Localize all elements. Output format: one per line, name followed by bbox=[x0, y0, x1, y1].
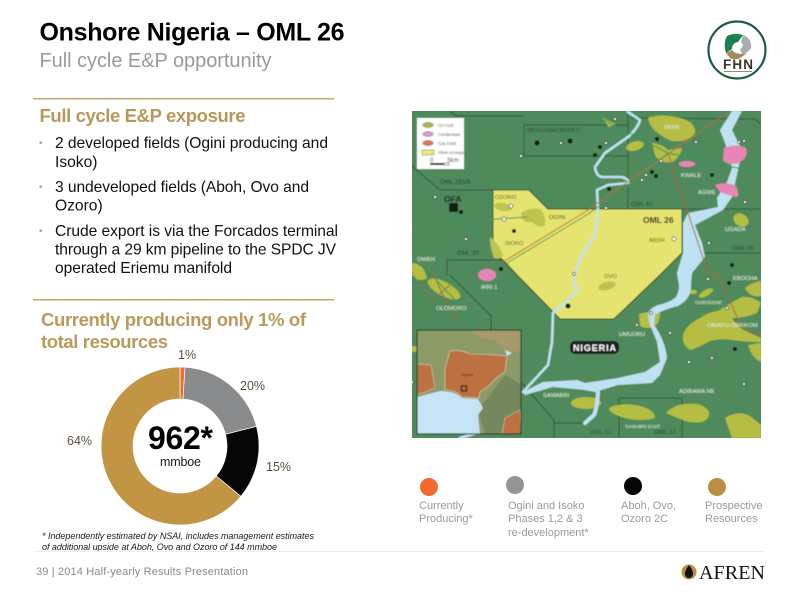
licence boundaries bbox=[412, 111, 761, 438]
heading: currently producing bbox=[41, 309, 307, 352]
legend: categories bbox=[419, 476, 762, 539]
inset map: Nigeria bbox=[461, 373, 474, 377]
map labels: OFA bbox=[444, 194, 461, 204]
map: OML 26: SAMABRI EAST bbox=[625, 424, 661, 430]
legend item: currently producing: Currently bbox=[419, 500, 464, 512]
bullet list: • bbox=[39, 226, 43, 237]
legend item: prospective resources: Resources bbox=[705, 513, 758, 525]
legend item: Aboh, Ovo, Ozoro 2C bbox=[621, 477, 676, 525]
legend box: Gas Field bbox=[438, 141, 457, 146]
map: OML 26: KWALE bbox=[681, 173, 701, 179]
legend box bbox=[417, 118, 465, 169]
map: OML 26: SAMABRI bbox=[543, 393, 569, 399]
bullet list bbox=[39, 135, 338, 277]
NIGERIA label bbox=[570, 341, 619, 354]
donut centre value: 962* bbox=[148, 420, 214, 456]
OFA block bbox=[449, 203, 458, 212]
NIGERIA label: NIGERIA bbox=[573, 343, 616, 353]
footer text: 39 | 2014 Half-yearly Results Presentation bbox=[36, 566, 248, 578]
inset: sea bbox=[417, 391, 483, 434]
donut centre unit: mmboe bbox=[160, 455, 201, 469]
map labels: OBODUGWA/OBODETI bbox=[526, 128, 580, 134]
oil well dots bbox=[459, 137, 737, 351]
map labels: OVO bbox=[604, 274, 617, 280]
oil fields bbox=[410, 116, 761, 438]
panel: full cycle exposure bbox=[33, 98, 338, 300]
map: OML 26: UMUORU bbox=[619, 332, 645, 338]
donut chart bbox=[67, 348, 291, 525]
map labels: ABOH bbox=[649, 238, 665, 244]
legend item: prospective resources bbox=[705, 478, 762, 525]
legend box: Oil Field bbox=[438, 123, 454, 128]
map: OML 26: UGADA bbox=[725, 227, 746, 233]
map labels: OML 26 bbox=[643, 215, 674, 225]
pink condensate fields bbox=[478, 146, 747, 281]
bullet list: 3 undeveloped fields (Aboh, Ovo and bbox=[55, 179, 309, 196]
legend item: prospective resources: Prospective bbox=[705, 500, 762, 512]
bullet list: operated Eriemu manifold bbox=[55, 260, 232, 277]
pipelines bbox=[412, 112, 761, 335]
map labels: OGINI bbox=[549, 215, 566, 221]
map labels: OML 27 bbox=[654, 429, 676, 436]
map labels: OML 60 bbox=[631, 201, 653, 208]
bullet list: • bbox=[39, 182, 43, 193]
legend item: Ogini and Isoko: Phases 1,2 & 3 bbox=[508, 513, 583, 525]
inset: Congo bbox=[502, 410, 521, 434]
bullet list: through a 29 km pipeline to the SPDC JV bbox=[55, 242, 337, 258]
bullet list: 2 developed fields (Ogini producing and bbox=[55, 135, 328, 152]
map: OML 26: OKPAI bbox=[664, 125, 679, 131]
map: OML 26: IRRI 1 bbox=[481, 285, 497, 291]
map labels: OML 283/8 bbox=[440, 179, 471, 186]
map labels: OML 61 bbox=[590, 429, 612, 436]
rivers bbox=[523, 111, 742, 395]
map: OML 26: ADIBAWA NE bbox=[679, 389, 715, 395]
donut labels: 1% bbox=[178, 348, 196, 362]
legend box: Condensate bbox=[438, 132, 461, 137]
icon: AFREN logo: AFREN bbox=[699, 562, 765, 584]
legend item: Ogini and Isoko bbox=[506, 476, 589, 539]
map: OML 26: OBIAFU-OBRIKOM bbox=[707, 323, 758, 329]
yellow Afren acreage bbox=[493, 190, 682, 319]
map labels bbox=[440, 128, 754, 436]
legend box: 5km bbox=[447, 158, 459, 164]
map: OML 26: EBOCHA bbox=[733, 276, 758, 282]
legend item: currently producing: Producing* bbox=[419, 513, 474, 525]
legend item: Ogini and Isoko: re-development* bbox=[508, 527, 589, 539]
inset map bbox=[417, 330, 521, 434]
map labels: OML 30 bbox=[457, 250, 479, 257]
legend box: 0 bbox=[430, 158, 434, 164]
map labels: OML 20 bbox=[732, 245, 754, 252]
donut labels: 15% bbox=[266, 460, 291, 474]
bullet list: Ozoro) bbox=[55, 198, 103, 214]
bullet list: Crude export is via the Forcados terminal bbox=[55, 223, 338, 240]
icon: FHN logo bbox=[708, 22, 766, 78]
title: Onshore Nigeria – OML 26 bbox=[40, 18, 344, 46]
bullet list: • bbox=[39, 138, 43, 149]
inset: Nigeria bbox=[445, 350, 507, 398]
map labels: ISOKO bbox=[505, 241, 524, 247]
footnote: of additional upside at Aboh, Ovo and Ozoro of 144 mmboe bbox=[42, 542, 277, 552]
map: OML 26: OGBOGENE bbox=[695, 300, 722, 305]
donut labels: 20% bbox=[240, 379, 265, 393]
footnote: * Independently estimated by NSAI, includes management estimates bbox=[42, 531, 314, 541]
map: OML 26 bbox=[410, 109, 763, 440]
subtitle: Full cycle E&P opportunity bbox=[40, 50, 272, 72]
legend item: Aboh, Ovo, Ozoro 2C: Aboh, Ovo, bbox=[621, 500, 676, 512]
heading: currently producing: Currently producing only 1% of bbox=[41, 309, 307, 330]
heading: exposure: Full cycle E&P exposure bbox=[40, 105, 246, 126]
heading: currently producing: total resources bbox=[41, 331, 168, 352]
map: OML 26: AGWE bbox=[698, 190, 716, 196]
donut labels bbox=[67, 348, 291, 474]
legend item: Ogini and Isoko: Ogini and Isoko bbox=[508, 500, 584, 512]
donut labels: 64% bbox=[67, 434, 92, 448]
map: OML 26: OWEH bbox=[417, 257, 435, 263]
inset: Ghana bbox=[417, 364, 435, 394]
legend box: Afren Acreage bbox=[438, 150, 465, 155]
map: OML 26: OLOMORO bbox=[436, 306, 467, 312]
footnote bbox=[42, 531, 314, 552]
bullet list: Isoko) bbox=[55, 154, 97, 171]
map labels: OZORO bbox=[495, 195, 517, 201]
legend item: currently producing bbox=[419, 478, 474, 525]
icon: FHN logo: FHN bbox=[723, 57, 753, 72]
legend item: Aboh, Ovo, Ozoro 2C: Ozoro 2C bbox=[621, 513, 668, 525]
well markers bbox=[410, 118, 746, 386]
